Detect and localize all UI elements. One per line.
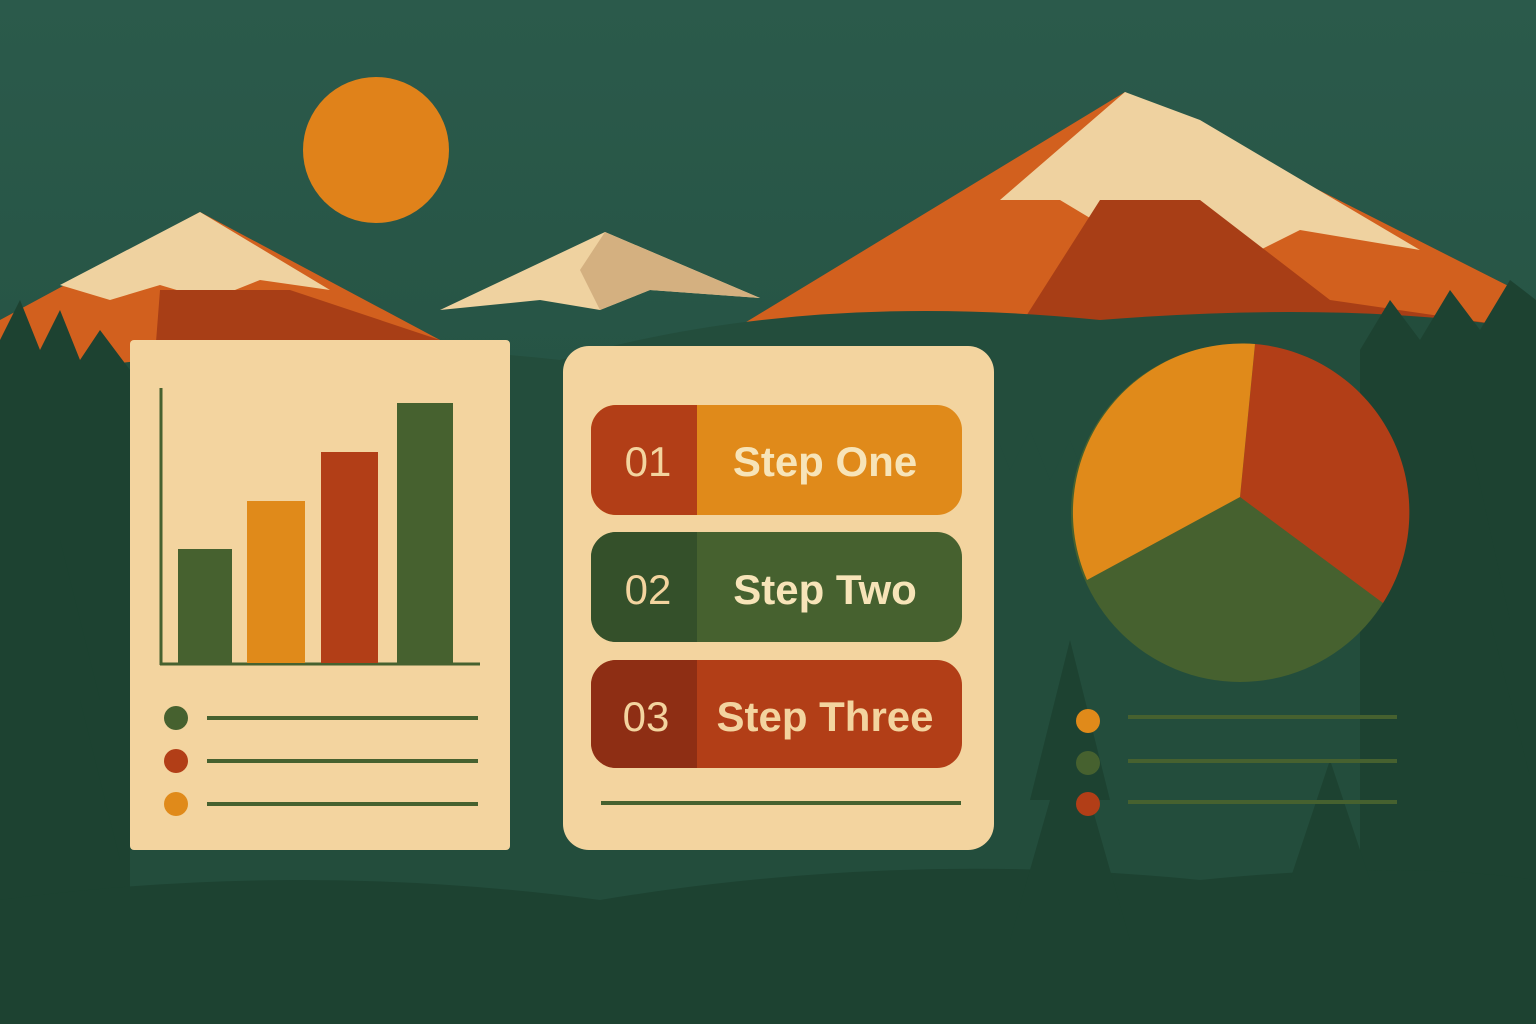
forest [0,311,1536,1024]
bar chart [160,388,480,665]
step three [591,660,962,768]
mountains [0,92,1536,420]
step one [591,405,962,515]
legend [164,706,478,816]
pie chart [1071,343,1409,682]
step one: Step One [733,438,917,485]
step three: Step Three [716,693,934,740]
step one: 01 [625,438,671,485]
step two: 02 [625,566,671,613]
panel: steps [563,346,994,850]
panel: bar chart card [130,340,510,850]
icon: sun [303,77,449,223]
pie legend [1076,709,1397,816]
step two: Step Two [733,566,917,613]
step two [591,532,962,642]
step three: 03 [623,693,669,740]
